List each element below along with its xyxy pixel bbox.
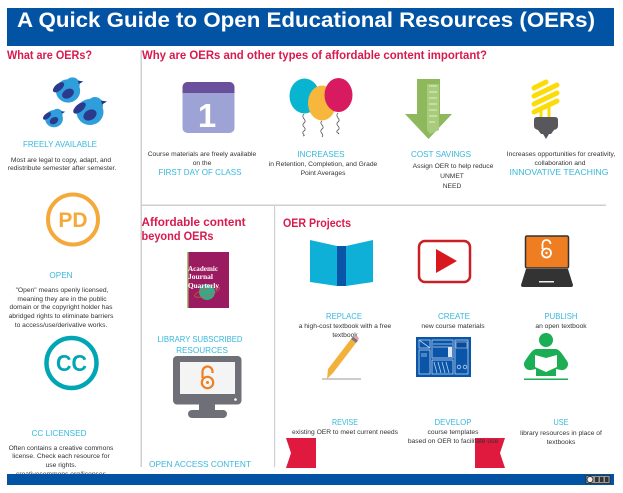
icon: CC license badge bbox=[586, 476, 610, 484]
create text bbox=[421, 312, 485, 330]
develop text: based on OER to facilitate use bbox=[408, 438, 498, 445]
panel: affordable content beyond OERs bbox=[142, 217, 251, 469]
CC licensed text bbox=[9, 429, 114, 478]
open text: to access/use/derivative works. bbox=[15, 322, 107, 329]
heading: affordable content: Affordable content bbox=[142, 217, 246, 229]
open text: "Open" means openly licensed, bbox=[16, 287, 109, 294]
increases text: in Retention, Completion, and Grade bbox=[269, 161, 378, 168]
freely available text: Most are legal to copy, adapt, and bbox=[11, 157, 111, 164]
panel: what are OERs bbox=[7, 50, 116, 478]
replace text bbox=[299, 312, 392, 339]
panel: why OERs are important bbox=[142, 50, 615, 190]
develop text: course templates bbox=[428, 429, 479, 436]
icon: calendar bbox=[182, 82, 234, 134]
publish text: an open textbook bbox=[535, 323, 587, 330]
revise text bbox=[292, 418, 399, 436]
icon: open book bbox=[310, 240, 373, 286]
heading: OER projects: OER Projects bbox=[283, 218, 351, 230]
icon: monitor with open access lock bbox=[173, 356, 242, 418]
icon: public domain: PD bbox=[58, 209, 88, 232]
use text bbox=[520, 418, 602, 446]
innovative teaching text bbox=[507, 151, 615, 177]
increases text bbox=[269, 150, 378, 177]
CC licensed text: license. Check each resource for bbox=[12, 453, 110, 460]
cost savings text: Assign OER to help reduce bbox=[413, 163, 494, 170]
replace text: a high-cost textbook with a free bbox=[299, 323, 392, 330]
open text: OPEN bbox=[49, 271, 73, 280]
first day of class text bbox=[148, 151, 257, 177]
icon: creative commons: CC bbox=[56, 350, 87, 376]
first day of class text: Course materials are freely available bbox=[148, 151, 257, 158]
heading: affordable content bbox=[142, 217, 246, 243]
innovative teaching text: collaboration and bbox=[535, 160, 586, 167]
library subscribed label bbox=[158, 335, 243, 355]
increases text: Point Averages bbox=[301, 170, 346, 177]
revise text: existing OER to meet current needs bbox=[292, 429, 399, 436]
icon: journal cover: Journal bbox=[188, 272, 213, 281]
library subscribed label: RESOURCES bbox=[176, 346, 228, 355]
develop text bbox=[408, 418, 498, 445]
library subscribed label: LIBRARY SUBSCRIBED bbox=[158, 335, 243, 344]
open text: meaning they are in the public bbox=[17, 296, 107, 303]
icon: balloons bbox=[290, 78, 352, 137]
heading: why important: Why are OERs and other types of affordable content important? bbox=[142, 50, 487, 62]
open text: domain or the copyright holder has bbox=[10, 304, 113, 311]
use text: textbooks bbox=[547, 439, 576, 446]
icon: person reading bbox=[524, 333, 568, 380]
publish text: PUBLISH bbox=[544, 312, 578, 321]
cost savings text bbox=[411, 150, 494, 190]
icon: calendar: 1 bbox=[198, 97, 216, 134]
footer bar bbox=[7, 474, 614, 485]
icon: light bulb bbox=[534, 82, 558, 139]
create text: CREATE bbox=[438, 312, 471, 321]
freely available text: FREELY AVAILABLE bbox=[23, 140, 98, 149]
use text: USE bbox=[554, 418, 569, 427]
cost savings text: NEED bbox=[443, 183, 461, 190]
heading: affordable content: beyond OERs bbox=[142, 231, 214, 243]
icon: red flag left bbox=[286, 438, 316, 468]
icon: creative commons bbox=[46, 338, 96, 388]
title banner: A Quick Guide to Open Educational Resources (OERs) bbox=[17, 9, 595, 32]
innovative teaching text: INNOVATIVE TEACHING bbox=[510, 168, 608, 177]
increases text: INCREASES bbox=[297, 150, 345, 159]
icon: journal cover bbox=[187, 252, 229, 308]
icon: red flag right bbox=[475, 438, 505, 468]
freely available text: redistribute semester after semester. bbox=[8, 165, 116, 172]
open access content label: OPEN ACCESS CONTENT bbox=[149, 460, 251, 469]
replace text: textbook bbox=[332, 332, 358, 339]
icon: blueprint bbox=[416, 337, 471, 377]
innovative teaching text: Increases opportunities for creativity, bbox=[507, 151, 615, 158]
replace text: REPLACE bbox=[326, 312, 362, 321]
icon: journal cover: Quarterly bbox=[188, 281, 219, 290]
icon: public domain bbox=[48, 194, 98, 244]
first day of class text: on the bbox=[193, 160, 212, 167]
icon: journal cover: Academic bbox=[188, 264, 219, 273]
title banner bbox=[7, 8, 614, 46]
freely available text bbox=[8, 140, 116, 172]
panel: OER projects bbox=[283, 218, 602, 468]
CC licensed text: use rights. bbox=[46, 462, 77, 469]
cost savings text: UNMET bbox=[440, 173, 464, 180]
icon: pencil bbox=[322, 335, 361, 380]
icon: video play bbox=[419, 241, 470, 282]
icon: laptop with lock bbox=[521, 236, 573, 287]
first day of class text: FIRST DAY OF CLASS bbox=[158, 168, 242, 177]
icon: green money arrow bbox=[405, 79, 452, 139]
open text: abridged rights to eliminate barriers bbox=[9, 313, 114, 320]
cost savings text: COST SAVINGS bbox=[411, 150, 472, 159]
publish text bbox=[535, 312, 587, 330]
CC licensed text: CC LICENSED bbox=[31, 429, 87, 438]
icon: birds bbox=[42, 77, 107, 127]
create text: new course materials bbox=[421, 323, 485, 330]
develop text: DEVELOP bbox=[434, 418, 472, 427]
use text: library resources in place of bbox=[520, 430, 602, 437]
revise text: REVISE bbox=[332, 418, 358, 427]
open text bbox=[9, 271, 114, 329]
CC licensed text: Often contains a creative commons bbox=[9, 445, 114, 452]
heading: what are OERs: What are OERs? bbox=[7, 50, 92, 62]
CC licensed text: creativecommons.org/licenses bbox=[16, 471, 107, 478]
